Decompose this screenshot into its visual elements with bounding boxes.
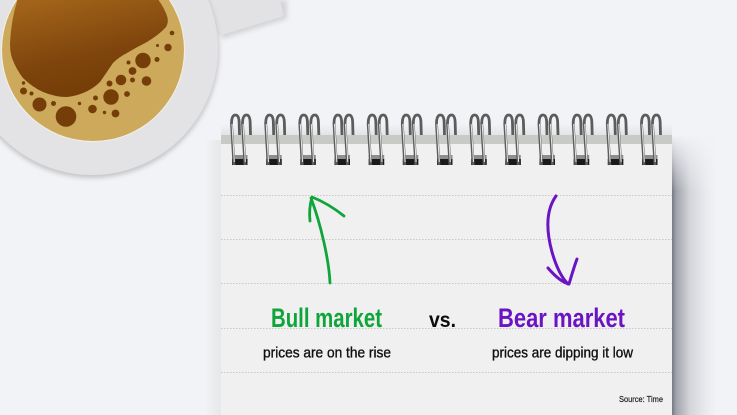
ruled lines — [221, 196, 672, 372]
caption: bull: prices are on the rise — [263, 346, 391, 362]
notepad shadow — [205, 135, 717, 415]
coffee surface — [1, 0, 185, 142]
saucer handle tab — [208, 0, 287, 39]
arrow: down (purple) — [548, 196, 577, 284]
saucer — [0, 0, 219, 178]
caption: bear: prices are dipping it low — [492, 346, 633, 362]
spiral rings — [232, 115, 660, 165]
dark brew — [10, 0, 168, 97]
arrow: up (green) — [310, 197, 344, 283]
heading: Bear market: Bear market — [498, 303, 625, 333]
notepad — [205, 115, 717, 415]
source note: Source: Time — [619, 394, 663, 404]
heading: Bull market: Bull market — [271, 303, 382, 333]
paper — [221, 144, 672, 415]
coffee cup on saucer — [0, 0, 287, 178]
top binding band — [221, 124, 672, 144]
vs label: vs. — [429, 309, 456, 332]
foam bubbles — [20, 31, 174, 127]
